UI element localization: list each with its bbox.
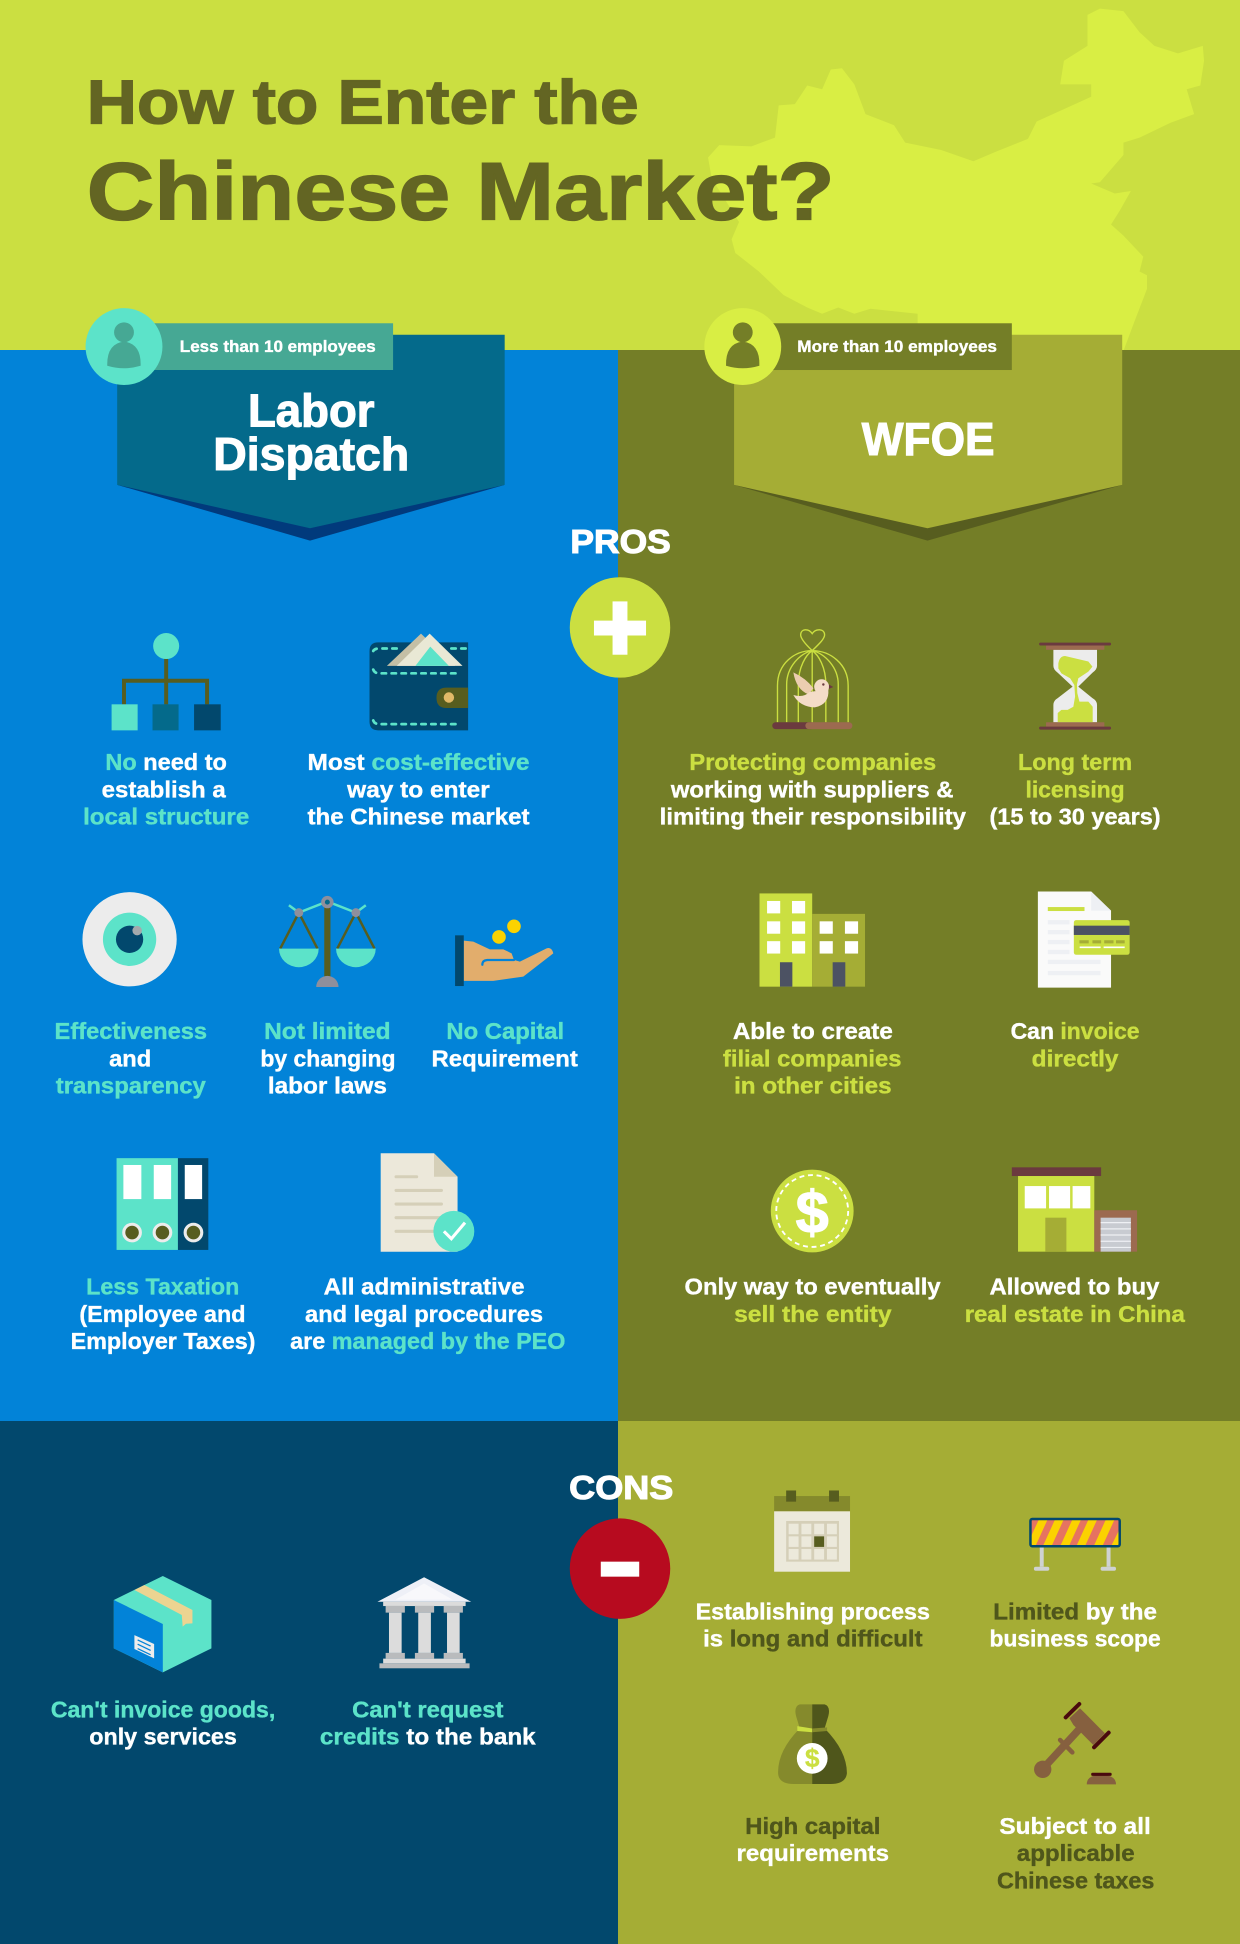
item: no need to establish a local structure bbox=[83, 633, 249, 830]
panel: WFOE pros background bbox=[618, 350, 1240, 1421]
text: limiting their responsibility bbox=[660, 804, 966, 830]
text: Can't invoice goods, bbox=[51, 1696, 275, 1722]
item: can invoice directly bbox=[1011, 892, 1140, 1071]
item: effectiveness and transparency bbox=[55, 892, 207, 1099]
text: applicable bbox=[1017, 1840, 1135, 1866]
title: How to Enter the bbox=[87, 68, 639, 137]
text bbox=[55, 1018, 207, 1099]
item: subject to all applicable Chinese taxes bbox=[997, 1704, 1154, 1894]
text bbox=[83, 749, 249, 830]
text: No need to bbox=[105, 749, 227, 775]
icon: calendar bbox=[774, 1490, 850, 1572]
text: transparency bbox=[56, 1073, 206, 1099]
item: no capital requirement bbox=[432, 919, 578, 1071]
text: Long term bbox=[1018, 749, 1132, 775]
item: sell the entity bbox=[684, 1170, 941, 1327]
text: High capital bbox=[745, 1813, 880, 1839]
text: working with suppliers & bbox=[670, 776, 954, 802]
text: Protecting companies bbox=[689, 749, 936, 775]
item: less taxation bbox=[71, 1158, 255, 1354]
panel: labor dispatch cons background bbox=[0, 1421, 620, 1944]
title: Chinese Market? bbox=[87, 146, 835, 237]
text bbox=[965, 1274, 1185, 1327]
text: credits to the bank bbox=[320, 1724, 536, 1750]
text: is long and difficult bbox=[703, 1626, 923, 1652]
text: (Employee and bbox=[79, 1301, 246, 1327]
text: local structure bbox=[83, 804, 249, 830]
icon: eye bbox=[82, 892, 177, 986]
text: Can't request bbox=[352, 1696, 504, 1722]
icon: dollar coin: $ bbox=[796, 1179, 829, 1246]
text bbox=[260, 1018, 396, 1099]
text: Not limited bbox=[264, 1018, 391, 1044]
text bbox=[51, 1696, 275, 1750]
icon: office buildings bbox=[760, 893, 865, 987]
text: Limited by the bbox=[993, 1598, 1157, 1624]
item: long term licensing bbox=[990, 643, 1161, 830]
item: administrative and legal procedures bbox=[290, 1153, 565, 1354]
text: (15 to 30 years) bbox=[990, 804, 1161, 830]
text: Only way to eventually bbox=[684, 1274, 941, 1300]
text: licensing bbox=[1025, 776, 1125, 802]
item: protecting companies bbox=[660, 630, 966, 830]
text: Employer Taxes) bbox=[71, 1328, 255, 1354]
text: Most cost-effective bbox=[308, 749, 529, 775]
map of China bbox=[708, 9, 1204, 351]
icon: dollar coin bbox=[771, 1170, 854, 1252]
text bbox=[432, 1018, 578, 1071]
item: filial companies bbox=[723, 893, 901, 1099]
text: business scope bbox=[990, 1626, 1161, 1652]
text: the Chinese market bbox=[308, 804, 530, 830]
text: Can invoice bbox=[1011, 1018, 1140, 1044]
banner: labor dispatch bbox=[86, 308, 505, 541]
item: limited by the business scope bbox=[990, 1519, 1161, 1652]
text: and legal procedures bbox=[305, 1301, 543, 1327]
item: most cost-effective bbox=[308, 634, 530, 830]
panel: WFOE cons background bbox=[618, 1421, 1240, 1944]
icon: invoice and credit card bbox=[1038, 892, 1130, 988]
header background bbox=[0, 0, 1240, 351]
text: labor laws bbox=[268, 1073, 387, 1099]
text: Subject to all bbox=[999, 1813, 1151, 1839]
panel: labor dispatch pros background bbox=[0, 350, 620, 1421]
text: All administrative bbox=[324, 1274, 525, 1300]
text: Effectiveness bbox=[55, 1018, 207, 1044]
text: in other cities bbox=[734, 1073, 892, 1099]
text bbox=[1011, 1018, 1140, 1071]
banner: WFOE bbox=[704, 308, 1122, 541]
icon: document with check bbox=[381, 1153, 474, 1252]
icon: road barrier bbox=[1030, 1519, 1120, 1571]
banner: WFOE: WFOE bbox=[862, 413, 994, 465]
text: directly bbox=[1032, 1045, 1119, 1071]
text bbox=[990, 1598, 1161, 1652]
text: way to enter bbox=[346, 776, 490, 802]
text bbox=[684, 1274, 941, 1327]
text: No Capital bbox=[446, 1018, 564, 1044]
banner: WFOE: More than 10 employees bbox=[797, 337, 997, 356]
text bbox=[737, 1813, 889, 1866]
banner: labor dispatch: Labor bbox=[248, 385, 375, 437]
text bbox=[997, 1813, 1154, 1894]
heading: cons: CONS bbox=[569, 1470, 673, 1507]
icon: hand with coins bbox=[455, 919, 553, 986]
icon: scales bbox=[279, 896, 376, 987]
text: are managed by the PEO bbox=[290, 1328, 565, 1354]
icon: gavel bbox=[1034, 1704, 1116, 1784]
text bbox=[320, 1696, 536, 1750]
text: and bbox=[109, 1045, 151, 1071]
item: establishing process bbox=[696, 1490, 930, 1652]
text: Requirement bbox=[432, 1045, 578, 1071]
text bbox=[71, 1274, 255, 1354]
text bbox=[290, 1274, 565, 1354]
icon: money bag bbox=[778, 1704, 847, 1784]
banner: labor dispatch: Dispatch bbox=[213, 428, 409, 480]
icon: money bag: $ bbox=[805, 1743, 820, 1773]
icon: wallet bbox=[370, 634, 468, 730]
icon: binders bbox=[117, 1158, 208, 1250]
text: filial companies bbox=[723, 1045, 901, 1071]
item: not limited by changing labor laws bbox=[260, 896, 396, 1099]
text bbox=[660, 749, 966, 830]
text: Able to create bbox=[733, 1018, 893, 1044]
icon: minus bbox=[570, 1518, 670, 1619]
heading: pros: PROS bbox=[570, 524, 671, 561]
banner: labor dispatch: Less than 10 employees bbox=[180, 337, 376, 356]
text: only services bbox=[89, 1724, 237, 1750]
icon: hourglass bbox=[1039, 643, 1111, 730]
icon: bank bbox=[377, 1577, 471, 1668]
text bbox=[696, 1598, 930, 1652]
icon: bird cage bbox=[772, 630, 852, 729]
text bbox=[308, 749, 530, 830]
text: by changing bbox=[260, 1045, 396, 1071]
item: high capital requirements bbox=[737, 1704, 889, 1866]
text: Establishing process bbox=[696, 1598, 930, 1624]
text: real estate in China bbox=[965, 1301, 1185, 1327]
item: allowed to buy real estate bbox=[965, 1167, 1185, 1327]
text: Allowed to buy bbox=[990, 1274, 1160, 1300]
text: sell the entity bbox=[734, 1301, 892, 1327]
icon: shop building bbox=[1012, 1167, 1137, 1252]
item: cannot request credits bbox=[320, 1577, 536, 1750]
icon: cardboard box bbox=[114, 1576, 211, 1672]
text: requirements bbox=[737, 1840, 889, 1866]
text bbox=[723, 1018, 901, 1099]
text bbox=[990, 749, 1161, 830]
icon: org chart bbox=[112, 633, 221, 730]
title bbox=[87, 68, 835, 237]
text: Chinese taxes bbox=[997, 1868, 1154, 1894]
icon: plus bbox=[570, 577, 670, 678]
item: cannot invoice goods bbox=[51, 1576, 275, 1750]
text: establish a bbox=[102, 776, 226, 802]
text: Less Taxation bbox=[86, 1274, 239, 1300]
